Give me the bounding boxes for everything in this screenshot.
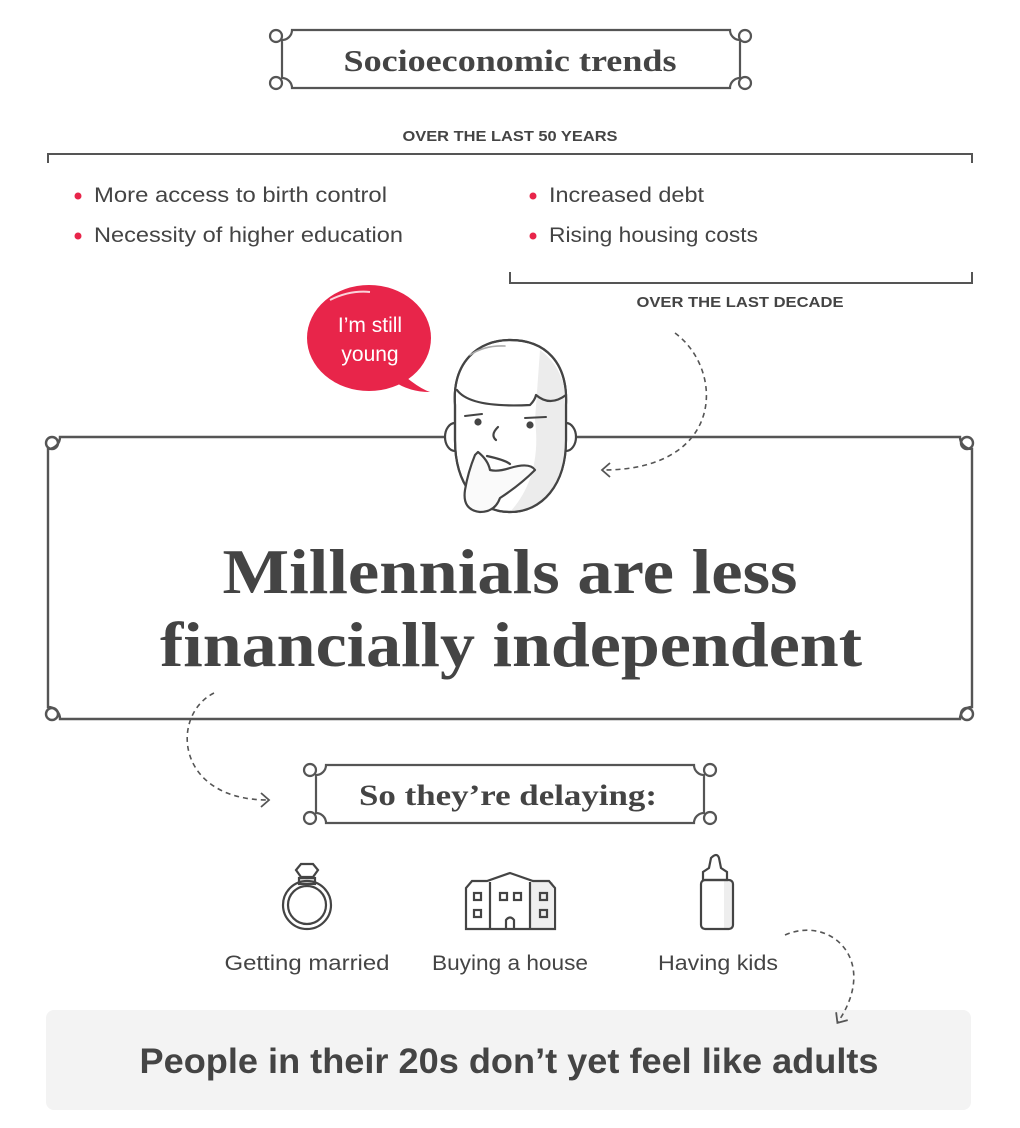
- speech bubble: [307, 285, 431, 392]
- main heading: [160, 536, 863, 680]
- icon: house: [466, 873, 555, 930]
- label: having kids: Having kids: [658, 952, 778, 975]
- subheading: So they’re delaying:: [359, 779, 657, 812]
- icon: thinking face: [445, 340, 576, 512]
- title frame: [270, 30, 751, 89]
- delaying frame: [304, 764, 716, 824]
- bullet list: long-term trends: [74, 184, 403, 247]
- speech bubble: young: [341, 343, 399, 366]
- bullet list: last decade: Increased debt: [549, 184, 704, 207]
- arrow: decade to face: [603, 333, 706, 470]
- label: over the last decade: OVER THE LAST DECADE: [636, 294, 844, 311]
- conclusion box: People in their 20s don’t yet feel like adults: [140, 1042, 879, 1081]
- icon: baby bottle: [701, 855, 733, 929]
- label: over the last decade: [510, 272, 972, 311]
- main heading: Millennials are less: [222, 536, 798, 607]
- arrow: to delaying: [187, 693, 268, 800]
- main heading: financially independent: [160, 609, 863, 680]
- label: over the last 50 years: OVER THE LAST 50 YEARS: [402, 128, 618, 145]
- conclusion box: [46, 1010, 971, 1110]
- arrow: to conclusion: [785, 930, 854, 1022]
- bullet list: last decade: Rising housing costs: [549, 224, 758, 247]
- label: over the last 50 years: [48, 128, 972, 163]
- bullet list: long-term trends: More access to birth control: [94, 184, 387, 207]
- icon: ring: [283, 864, 331, 929]
- bullet list: last decade: [530, 184, 758, 247]
- title: Socioeconomic trends: [344, 43, 676, 78]
- label: getting married: Getting married: [224, 952, 390, 975]
- label: buying a house: Buying a house: [432, 952, 588, 975]
- bullet list: long-term trends: Necessity of higher education: [94, 224, 403, 247]
- main frame: [46, 437, 973, 720]
- speech bubble: I’m still: [338, 314, 402, 337]
